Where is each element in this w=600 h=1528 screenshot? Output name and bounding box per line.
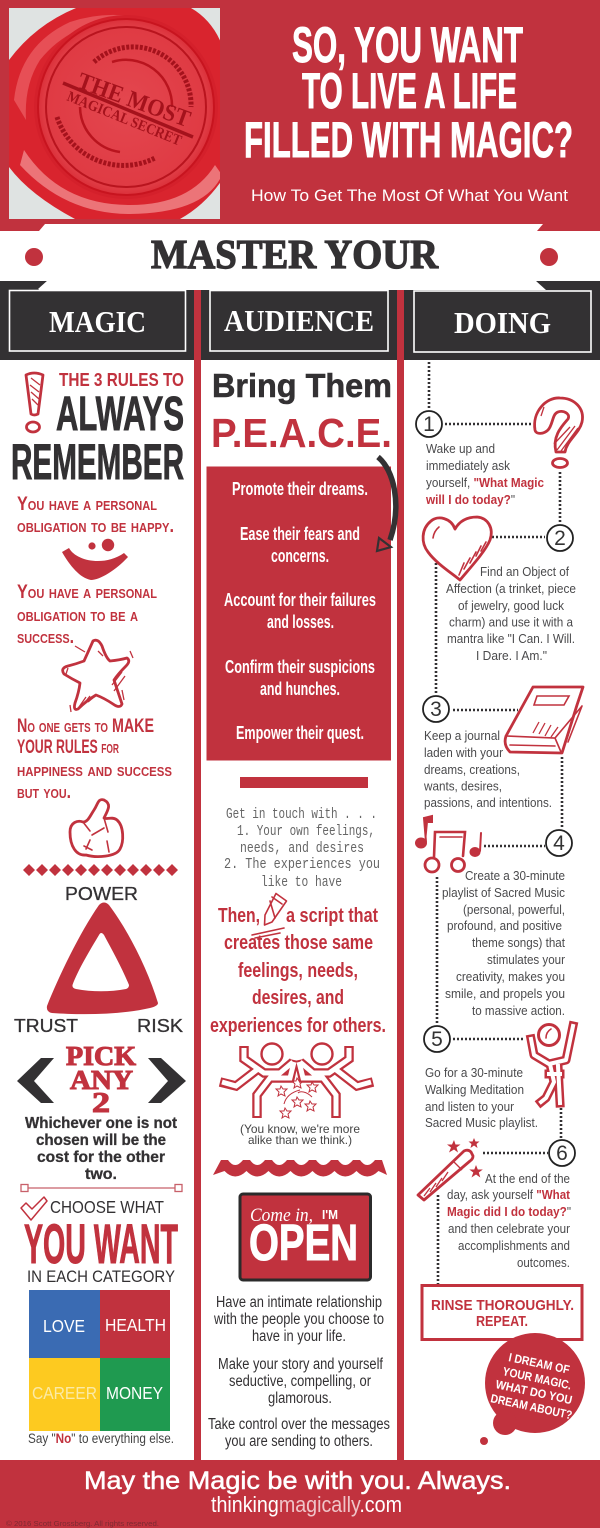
rule three bbox=[17, 716, 172, 803]
step 2 text: of jewelry, good luck bbox=[458, 599, 565, 613]
then write a script text: creates those same bbox=[224, 932, 373, 954]
step 3 text bbox=[423, 729, 552, 810]
icon: thumbs up bbox=[70, 800, 123, 857]
get in touch text: 2. The experiences you bbox=[224, 857, 380, 873]
callout: rinse repeat: REPEAT. bbox=[476, 1313, 528, 1330]
audience closing text: Make your story and yourself bbox=[218, 1356, 384, 1373]
icon: checkmark bbox=[21, 1197, 47, 1220]
audience closing text bbox=[208, 1294, 390, 1450]
column heading: magic bbox=[10, 290, 186, 351]
step 1 text: yourself, "What Magic bbox=[426, 476, 544, 490]
panel: peace list: Empower their quest. bbox=[236, 723, 364, 743]
step 6 text: and then celebrate your bbox=[448, 1222, 570, 1236]
handle divider bbox=[21, 1184, 182, 1192]
get in touch text: Get in touch with . . . bbox=[226, 807, 377, 823]
panel: doing column bbox=[415, 362, 585, 1445]
step 3 marker: 3 bbox=[430, 698, 442, 721]
step 3 text: laden with your bbox=[424, 746, 503, 760]
rule two: You have a personal bbox=[17, 582, 157, 603]
get in touch text: like to have bbox=[261, 875, 342, 891]
open sign: I'M bbox=[322, 1207, 338, 1222]
step 4 text: creativity, makes you bbox=[456, 970, 565, 984]
chevrons and pick any 2 bbox=[17, 1041, 186, 1119]
whichever text: cost for the other bbox=[37, 1149, 165, 1166]
callout: thought bubble: WHAT DO YOU bbox=[494, 1377, 574, 1407]
icon: magic wand bbox=[418, 1138, 483, 1200]
copyright: © 2016 Scott Grossberg. All rights reserved. bbox=[6, 1519, 159, 1528]
callout: rinse repeat: RINSE THOROUGHLY. bbox=[431, 1297, 574, 1314]
icon: question mark bbox=[535, 398, 582, 468]
website: thinkingmagically.com bbox=[211, 1492, 402, 1517]
step 2 text bbox=[446, 565, 576, 663]
step 4 marker: 4 bbox=[553, 832, 565, 855]
audience closing text: you are sending to others. bbox=[225, 1433, 373, 1450]
heading: the 3 rules: THE 3 RULES TO bbox=[59, 370, 184, 390]
panel: peace list: and losses. bbox=[267, 612, 334, 632]
heading: choose what you want: IN EACH CATEGORY bbox=[27, 1268, 175, 1286]
rule three: No one gets to MAKE bbox=[17, 716, 154, 737]
icon: heart bbox=[423, 517, 491, 580]
column heading: doing bbox=[414, 291, 591, 352]
step 6 text: Magic did I do today?" bbox=[447, 1205, 571, 1219]
whichever text: chosen will be the bbox=[36, 1132, 166, 1149]
rule three: but you. bbox=[17, 782, 71, 803]
step 3 text: passions, and intentions. bbox=[424, 796, 552, 810]
chevrons and pick any 2: 2 bbox=[92, 1088, 110, 1119]
whichever text: two. bbox=[85, 1166, 117, 1183]
panel: audience column bbox=[206, 367, 396, 1450]
step 2 marker bbox=[547, 525, 573, 551]
step 4 text: theme songs) that bbox=[472, 936, 565, 950]
step 1 marker bbox=[416, 411, 442, 437]
panel: peace list: Confirm their suspicions bbox=[225, 657, 375, 677]
heading: choose what you want bbox=[24, 1197, 178, 1286]
rule three: YOUR RULES for bbox=[17, 737, 119, 758]
step 6 text: At the end of the bbox=[485, 1172, 570, 1186]
subtitle: How To Get The Most Of What You Want bbox=[251, 186, 568, 205]
panel: peace list: and hunches. bbox=[260, 679, 340, 699]
rule two: success. bbox=[17, 627, 74, 648]
then write a script text bbox=[210, 905, 386, 1037]
icon: dancing person bbox=[531, 1024, 573, 1103]
heading: bring them peace: Bring Them bbox=[212, 367, 392, 404]
panel: magic column bbox=[11, 370, 186, 1446]
heading: the 3 rules: REMEMBER bbox=[11, 434, 184, 490]
step 1 text bbox=[425, 442, 544, 507]
step 5 text bbox=[425, 1066, 538, 1130]
audience closing text: Take control over the messages bbox=[208, 1416, 390, 1433]
open sign bbox=[240, 1194, 370, 1280]
step 4 text: playlist of Sacred Music bbox=[442, 886, 565, 900]
then write a script text: a script that bbox=[286, 905, 378, 927]
icon: book bbox=[505, 687, 583, 753]
rule one: obligation to be happy. bbox=[17, 516, 174, 537]
step 2 text: charm) and use it with a bbox=[449, 616, 573, 630]
column heading: doing: DOING bbox=[454, 305, 551, 340]
scallop divider bbox=[213, 1160, 387, 1176]
column dividers bbox=[194, 290, 404, 1460]
panel: peace list: concerns. bbox=[271, 546, 329, 566]
audience closing text: with the people you choose to bbox=[213, 1311, 384, 1328]
dotted path bbox=[429, 362, 562, 1285]
then write a script text: experiences for others. bbox=[210, 1015, 386, 1037]
category grid: HEALTH bbox=[105, 1315, 166, 1335]
triangle chart: power trust risk: RISK bbox=[137, 1015, 184, 1036]
step 4 text: smile, and propels you bbox=[445, 987, 565, 1001]
step 3 text: dreams, creations, bbox=[424, 763, 520, 777]
photo: red wax seal: THE MOST bbox=[74, 68, 194, 133]
diamond divider bbox=[23, 864, 178, 876]
heading: bring them peace: P.E.A.C.E. bbox=[211, 410, 392, 456]
step 5 marker: 5 bbox=[431, 1028, 443, 1051]
then write a script text: desires, and bbox=[252, 987, 344, 1009]
icon: two figures high five bbox=[220, 1044, 373, 1118]
ribbon: master your: MASTER YOUR bbox=[151, 231, 438, 277]
step 4 text: Create a 30-minute bbox=[465, 869, 565, 883]
icon: music notes bbox=[415, 816, 481, 872]
panel: peace list: Account for their failures bbox=[224, 590, 376, 610]
caption: alike: (You know, we're more bbox=[240, 1122, 360, 1136]
step 6 marker bbox=[549, 1140, 575, 1166]
then write a script text: feelings, needs, bbox=[238, 960, 358, 982]
column heading: audience: AUDIENCE bbox=[224, 303, 374, 338]
icon: smile bbox=[62, 539, 128, 580]
step 2 marker: 2 bbox=[554, 527, 566, 550]
callout: thought bubble: I DREAM OF bbox=[507, 1350, 571, 1377]
step 2 text: Find an Object of bbox=[480, 565, 569, 579]
heading: bring them peace bbox=[211, 367, 392, 456]
header tabs band bbox=[0, 280, 600, 360]
audience closing text: glamorous. bbox=[268, 1390, 332, 1407]
open sign: Come in, bbox=[250, 1205, 313, 1226]
step 6 text bbox=[447, 1172, 571, 1270]
triangle chart: power trust risk bbox=[14, 883, 184, 1036]
step 3 text: wants, desires, bbox=[423, 780, 502, 794]
header band bbox=[0, 0, 600, 231]
closing line: May the Magic be with you. Always. bbox=[84, 1467, 511, 1495]
get in touch text: 1. Your own feelings, bbox=[237, 824, 375, 840]
step 4 text: profound, and positive bbox=[447, 919, 562, 933]
rule two: obligation to be a bbox=[17, 605, 139, 626]
category grid bbox=[29, 1290, 170, 1431]
audience closing text: have in your life. bbox=[252, 1328, 346, 1345]
arrow: curved bbox=[377, 457, 396, 551]
chevrons and pick any 2: PICK bbox=[66, 1041, 136, 1071]
photo: red wax seal bbox=[9, 8, 222, 219]
red bar bbox=[240, 777, 368, 788]
step 1 text: immediately ask bbox=[426, 459, 511, 473]
step 3 marker bbox=[423, 696, 449, 722]
panel: peace list bbox=[206, 466, 391, 760]
rule two bbox=[17, 582, 157, 648]
heading: choose what you want: YOU WANT bbox=[24, 1212, 178, 1275]
triangle chart: power trust risk: POWER bbox=[65, 883, 138, 904]
callout: rinse repeat bbox=[422, 1286, 582, 1340]
column heading: audience bbox=[210, 290, 388, 351]
callout: thought bubble: DREAM ABOUT? bbox=[489, 1391, 573, 1422]
step 4 text: stimulates your bbox=[487, 953, 565, 967]
step 6 text: accomplishments and bbox=[458, 1239, 570, 1253]
step 5 marker bbox=[424, 1026, 450, 1052]
chevrons and pick any 2: ANY bbox=[70, 1065, 133, 1095]
whichever text bbox=[25, 1115, 178, 1183]
step 4 text: (personal, powerful, bbox=[463, 903, 565, 917]
step 6 text: outcomes. bbox=[517, 1256, 570, 1270]
title bbox=[244, 17, 573, 168]
step 3 text: Keep a journal bbox=[424, 729, 500, 743]
step 5 text: Go for a 30-minute bbox=[425, 1066, 523, 1080]
rule one: You have a personal bbox=[17, 494, 157, 515]
category grid: MONEY bbox=[106, 1383, 163, 1403]
step 4 text bbox=[442, 869, 565, 1018]
then write a script text: Then, bbox=[218, 905, 260, 927]
step 2 text: Affection (a trinket, piece bbox=[446, 582, 576, 596]
step 1 text: will I do today?" bbox=[425, 493, 515, 507]
get in touch text bbox=[224, 807, 380, 891]
get in touch text: needs, and desires bbox=[240, 841, 364, 857]
step 5 text: Sacred Music playlist. bbox=[425, 1116, 538, 1130]
panel: peace list: Ease their fears and bbox=[240, 524, 360, 544]
heading: the 3 rules bbox=[11, 370, 184, 490]
rule one bbox=[17, 494, 174, 537]
category grid: CAREER bbox=[32, 1383, 97, 1403]
icon: star bbox=[63, 640, 133, 712]
step 6 text: day, ask yourself "What bbox=[447, 1188, 571, 1202]
category grid: LOVE bbox=[43, 1316, 85, 1336]
whichever text: Whichever one is not bbox=[25, 1115, 178, 1132]
heading: the 3 rules: ALWAYS bbox=[56, 388, 184, 441]
audience closing text: Have an intimate relationship bbox=[216, 1294, 382, 1311]
open sign: OPEN bbox=[249, 1214, 358, 1271]
step 1 text: Wake up and bbox=[426, 442, 495, 456]
caption: alike: alike than we think.) bbox=[248, 1133, 352, 1147]
icon: exclamation mark bbox=[26, 373, 43, 432]
ribbon: master your bbox=[0, 224, 600, 290]
rule three: happiness and success bbox=[17, 760, 172, 781]
callout: thought bubble: YOUR MAGIC. bbox=[501, 1364, 573, 1392]
step 2 text: mantra like "I Can. I Will. bbox=[447, 632, 575, 646]
say no caption: Say "No" to everything else. bbox=[28, 1431, 174, 1446]
step 5 text: Walking Meditation bbox=[425, 1083, 524, 1097]
callout: thought bubble bbox=[480, 1333, 585, 1445]
audience closing text: seductive, compelling, or bbox=[229, 1373, 371, 1390]
step 2 text: I Dare. I Am." bbox=[476, 649, 547, 663]
triangle chart: power trust risk: TRUST bbox=[14, 1015, 78, 1036]
step 1 marker: 1 bbox=[423, 413, 435, 436]
step 4 marker bbox=[546, 830, 572, 856]
step 5 text: and listen to your bbox=[425, 1100, 514, 1114]
column heading: magic: MAGIC bbox=[49, 304, 146, 339]
step 6 marker: 6 bbox=[556, 1142, 568, 1165]
footer band bbox=[0, 1460, 600, 1528]
heading: choose what you want: CHOOSE WHAT bbox=[50, 1197, 164, 1217]
photo: red wax seal: MAGICAL SECRET bbox=[65, 89, 184, 149]
step 4 text: to massive action. bbox=[472, 1004, 565, 1018]
icon: pencil bbox=[252, 894, 286, 938]
panel: peace list: Promote their dreams. bbox=[232, 479, 368, 499]
caption: alike bbox=[240, 1122, 360, 1147]
